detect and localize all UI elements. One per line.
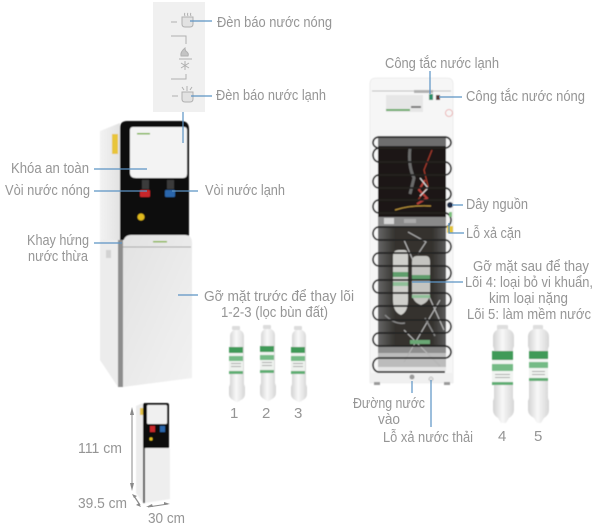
label: drip tray: Khay hứng xyxy=(27,232,89,249)
label: rear cover xyxy=(465,258,593,323)
label: front cover xyxy=(204,288,354,321)
leader lines front xyxy=(94,21,212,295)
base xyxy=(370,373,453,385)
label: water inlet: Đường nước xyxy=(353,395,425,412)
icon: hot water light xyxy=(171,13,193,27)
icon: flame and snow button xyxy=(171,36,192,79)
label: water inlet xyxy=(353,395,425,428)
filter 1 xyxy=(229,326,245,402)
filter cartridges 4-5 xyxy=(492,325,549,423)
cold switch xyxy=(429,94,433,100)
label: safety lock: Khóa an toàn xyxy=(11,160,89,177)
label: drip tray: nước thừa xyxy=(28,248,89,265)
water dispenser front view xyxy=(100,121,192,387)
label: height: 111 cm xyxy=(78,440,122,457)
label: hot tap: Vòi nước nóng xyxy=(5,182,90,199)
grey strip xyxy=(118,240,123,387)
dimension arrows xyxy=(130,407,170,507)
filter numbers 1-2-3: 2 xyxy=(262,405,270,422)
filter numbers 1-2-3 xyxy=(230,405,302,422)
label: hot switch: Công tắc nước nóng xyxy=(466,88,585,105)
mid bracket xyxy=(378,217,446,226)
label: drip tray xyxy=(27,232,89,265)
icon: cold water light xyxy=(172,86,193,102)
lower cabinet xyxy=(123,235,192,387)
brand mark xyxy=(137,133,150,134)
label: front cover: Gỡ mặt trước để thay lõi xyxy=(204,288,354,305)
filter 3 xyxy=(291,326,307,402)
cooling coils xyxy=(373,137,451,372)
label: drain: Lỗ xả cặn xyxy=(466,225,521,242)
power cord xyxy=(447,202,453,208)
RO cartridges inside xyxy=(393,250,430,344)
filter 2 xyxy=(260,325,276,401)
label: water inlet: vào xyxy=(378,411,400,428)
filter numbers 1-2-3: 3 xyxy=(294,405,302,422)
rear view of dispenser xyxy=(370,78,453,385)
label: hot light: Đèn báo nước nóng xyxy=(217,14,332,31)
icon: yellow sticker xyxy=(112,134,118,154)
small dispenser with dimensions xyxy=(136,403,170,503)
filter numbers 4-5: 4 xyxy=(498,428,506,445)
wiring xyxy=(385,148,444,366)
drain valve xyxy=(447,226,453,233)
yellow safety button xyxy=(138,214,144,220)
label: power cord: Dây nguồn xyxy=(466,196,528,213)
label: depth: 39.5 cm xyxy=(78,495,127,512)
label: cold tap: Vòi nước lạnh xyxy=(205,182,285,199)
black front xyxy=(120,121,189,240)
label: front cover: 1-2-3 (lọc bùn đất) xyxy=(221,304,328,321)
rating label xyxy=(386,95,423,112)
filter numbers 4-5: 5 xyxy=(534,428,542,445)
filter numbers 4-5 xyxy=(498,428,542,445)
filter cartridges 1-2-3 xyxy=(229,325,307,402)
filter 5 xyxy=(528,325,549,423)
red hot tap xyxy=(140,180,150,197)
leader lines rear xyxy=(412,71,464,427)
label: rear cover: kim loại nặng xyxy=(489,290,568,307)
hot switch xyxy=(436,95,440,100)
lower compartment xyxy=(378,226,446,346)
filter 4 xyxy=(492,325,514,423)
label: cold switch: Công tắc nước lạnh xyxy=(385,55,499,72)
label: waste water: Lỗ xả nước thải xyxy=(383,429,473,446)
white door panel xyxy=(130,127,187,178)
label: cold light: Đèn báo nước lạnh xyxy=(216,87,326,104)
rear casing xyxy=(370,78,453,383)
filter numbers 1-2-3: 1 xyxy=(230,405,238,422)
body side xyxy=(100,123,120,387)
upper compartment xyxy=(378,137,446,221)
control panel close-up xyxy=(153,2,205,112)
blue cold tap xyxy=(165,180,175,197)
